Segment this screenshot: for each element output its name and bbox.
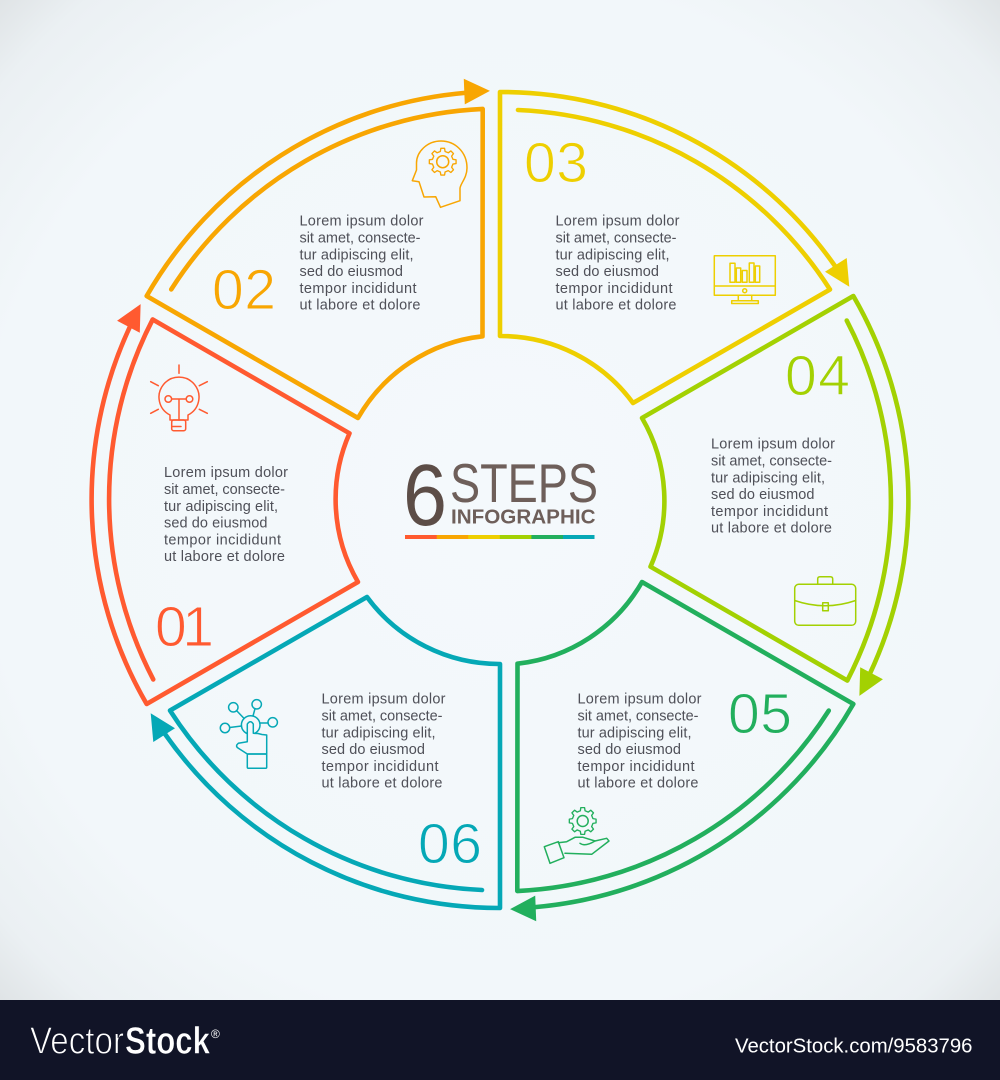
step 03 text: tempor incididunt bbox=[556, 281, 672, 297]
step 06 text: sit amet, consecte- bbox=[322, 708, 443, 724]
step 03 text: sed do eiusmod bbox=[556, 264, 659, 280]
footer image id: VectorStock.com/9583796 bbox=[735, 1036, 972, 1058]
panel: step 03 bbox=[500, 92, 849, 403]
footer logo: Stock bbox=[125, 1020, 211, 1062]
colour bar bbox=[405, 535, 594, 539]
step 03 text: ut labore et dolore bbox=[556, 298, 676, 314]
icon: light bulb bbox=[151, 365, 207, 431]
step 06 text: Lorem ipsum dolor bbox=[322, 692, 446, 708]
subheading INFOGRAPHIC: INFOGRAPHIC bbox=[451, 506, 596, 528]
center title bbox=[403, 447, 598, 544]
step 03 text: sit amet, consecte- bbox=[556, 230, 677, 246]
step 01 text bbox=[164, 465, 288, 565]
step 02 number: 02 bbox=[212, 258, 276, 322]
step 05 text: sit amet, consecte- bbox=[578, 708, 699, 724]
step 04 text: sed do eiusmod bbox=[711, 487, 814, 503]
step 06 text: ut labore et dolore bbox=[322, 776, 442, 792]
panel: step 04 bbox=[584, 296, 1000, 754]
step 06 number: 06 bbox=[418, 812, 482, 876]
panel: step 01 bbox=[0, 246, 416, 704]
step 05 outline with arrow bbox=[409, 548, 853, 1007]
big numeral 6: 6 bbox=[403, 447, 447, 544]
step 05 text: sed do eiusmod bbox=[578, 742, 681, 758]
step 06 text: tempor incididunt bbox=[322, 759, 438, 775]
icon: monitor with chart bbox=[714, 256, 775, 304]
panel: step 05 bbox=[409, 548, 853, 1007]
step 04 number: 04 bbox=[785, 344, 850, 408]
step 04 outline with arrow bbox=[584, 296, 1000, 754]
step 02 text bbox=[300, 214, 424, 314]
step 02 text: sit amet, consecte- bbox=[300, 230, 421, 246]
step 04 text bbox=[711, 436, 835, 536]
step 03 text: tur adipiscing elit, bbox=[556, 248, 670, 264]
step 05 text: tur adipiscing elit, bbox=[578, 726, 692, 742]
panel: step 02 bbox=[147, 0, 591, 451]
step 02 text: ut labore et dolore bbox=[300, 298, 420, 314]
step 01 text: sed do eiusmod bbox=[164, 516, 268, 532]
step 06 outline with arrow bbox=[151, 597, 500, 908]
step 01 text: tur adipiscing elit, bbox=[164, 499, 278, 515]
footer logo: Vector bbox=[30, 1020, 124, 1062]
step 06 text: sed do eiusmod bbox=[322, 742, 425, 758]
step 05 text: ut labore et dolore bbox=[578, 776, 698, 792]
step 01 text: ut labore et dolore bbox=[164, 549, 285, 565]
step 03 text bbox=[556, 214, 680, 314]
step 02 outline with arrow bbox=[147, 0, 591, 451]
footer logo: ® bbox=[211, 1027, 220, 1041]
icon: hand touching network bbox=[220, 700, 277, 768]
step 02 text: tur adipiscing elit, bbox=[300, 248, 414, 264]
panel: step 06 bbox=[151, 597, 500, 908]
step 04 text: tempor incididunt bbox=[711, 504, 828, 520]
footer bar bbox=[0, 1000, 1000, 1080]
step 02 text: tempor incididunt bbox=[300, 281, 416, 297]
step 01 number: 01 bbox=[155, 595, 214, 659]
step 01 text: sit amet, consecte- bbox=[164, 482, 285, 498]
step 04 text: sit amet, consecte- bbox=[711, 454, 832, 470]
heading STEPS: STEPS bbox=[450, 452, 598, 514]
step 04 text: ut labore et dolore bbox=[711, 520, 832, 536]
step 03 outline with arrow bbox=[500, 92, 849, 403]
step 04 text: tur adipiscing elit, bbox=[711, 470, 825, 486]
step 06 text bbox=[322, 692, 446, 792]
step 01 text: tempor incididunt bbox=[164, 532, 281, 548]
step 03 number: 03 bbox=[524, 131, 588, 195]
step 04 text: Lorem ipsum dolor bbox=[711, 436, 835, 452]
icon: head with gear bbox=[412, 141, 467, 207]
step 06 text: tur adipiscing elit, bbox=[322, 726, 436, 742]
step 05 number: 05 bbox=[728, 682, 792, 746]
step 05 text bbox=[578, 692, 702, 792]
step 05 text: tempor incididunt bbox=[578, 759, 694, 775]
step 02 text: sed do eiusmod bbox=[300, 264, 403, 280]
step 01 text: Lorem ipsum dolor bbox=[164, 465, 288, 481]
step 02 text: Lorem ipsum dolor bbox=[300, 214, 424, 230]
step 01 outline with arrow bbox=[0, 246, 416, 704]
step 03 text: Lorem ipsum dolor bbox=[556, 214, 680, 230]
icon: hand holding gear bbox=[544, 808, 609, 863]
icon: briefcase bbox=[795, 577, 856, 625]
step 05 text: Lorem ipsum dolor bbox=[578, 692, 702, 708]
